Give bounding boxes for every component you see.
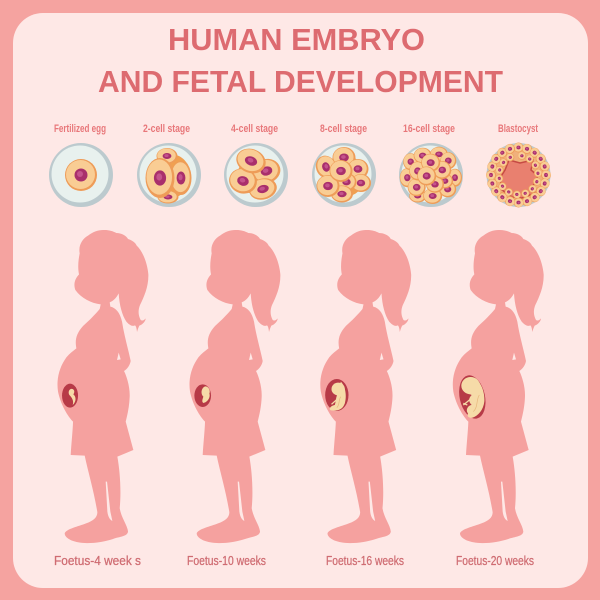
week labels: Foetus-4 week s bbox=[54, 554, 141, 568]
icon: blastocyst bbox=[486, 142, 551, 208]
stage labels: Fertilized egg bbox=[54, 123, 106, 135]
icon: 2-cell stage bbox=[137, 143, 201, 207]
silhouette: 20 weeks bbox=[453, 230, 544, 543]
silhouette: 16 weeks bbox=[320, 230, 411, 543]
week labels: Foetus-10 weeks bbox=[187, 554, 266, 568]
stage labels bbox=[54, 123, 538, 135]
icon: 16-cell stage bbox=[399, 143, 463, 207]
icon: embryo 10 weeks bbox=[194, 384, 211, 407]
icon: embryo 20 weeks bbox=[455, 373, 489, 421]
stage labels: Blastocyst bbox=[498, 123, 538, 135]
week labels bbox=[54, 554, 534, 568]
silhouette: 10 weeks bbox=[189, 230, 280, 543]
icon: 8-cell stage bbox=[312, 143, 376, 207]
silhouette: 4 weeks bbox=[57, 230, 148, 543]
title: HUMAN EMBRYO bbox=[168, 22, 425, 57]
stage labels: 4-cell stage bbox=[231, 123, 278, 135]
title: AND FETAL DEVELOPMENT bbox=[98, 64, 503, 99]
week labels: Foetus-16 weeks bbox=[326, 554, 404, 568]
icon: embryo 4 weeks bbox=[62, 384, 78, 408]
title bbox=[98, 22, 503, 99]
stage labels: 2-cell stage bbox=[143, 123, 190, 135]
stage labels: 8-cell stage bbox=[320, 123, 367, 135]
icon: 4-cell stage bbox=[224, 143, 288, 207]
stage labels: 16-cell stage bbox=[403, 123, 455, 135]
icon: fertilized egg bbox=[49, 143, 113, 207]
week labels: Foetus-20 weeks bbox=[456, 554, 534, 568]
icon: embryo 16 weeks bbox=[325, 379, 348, 411]
